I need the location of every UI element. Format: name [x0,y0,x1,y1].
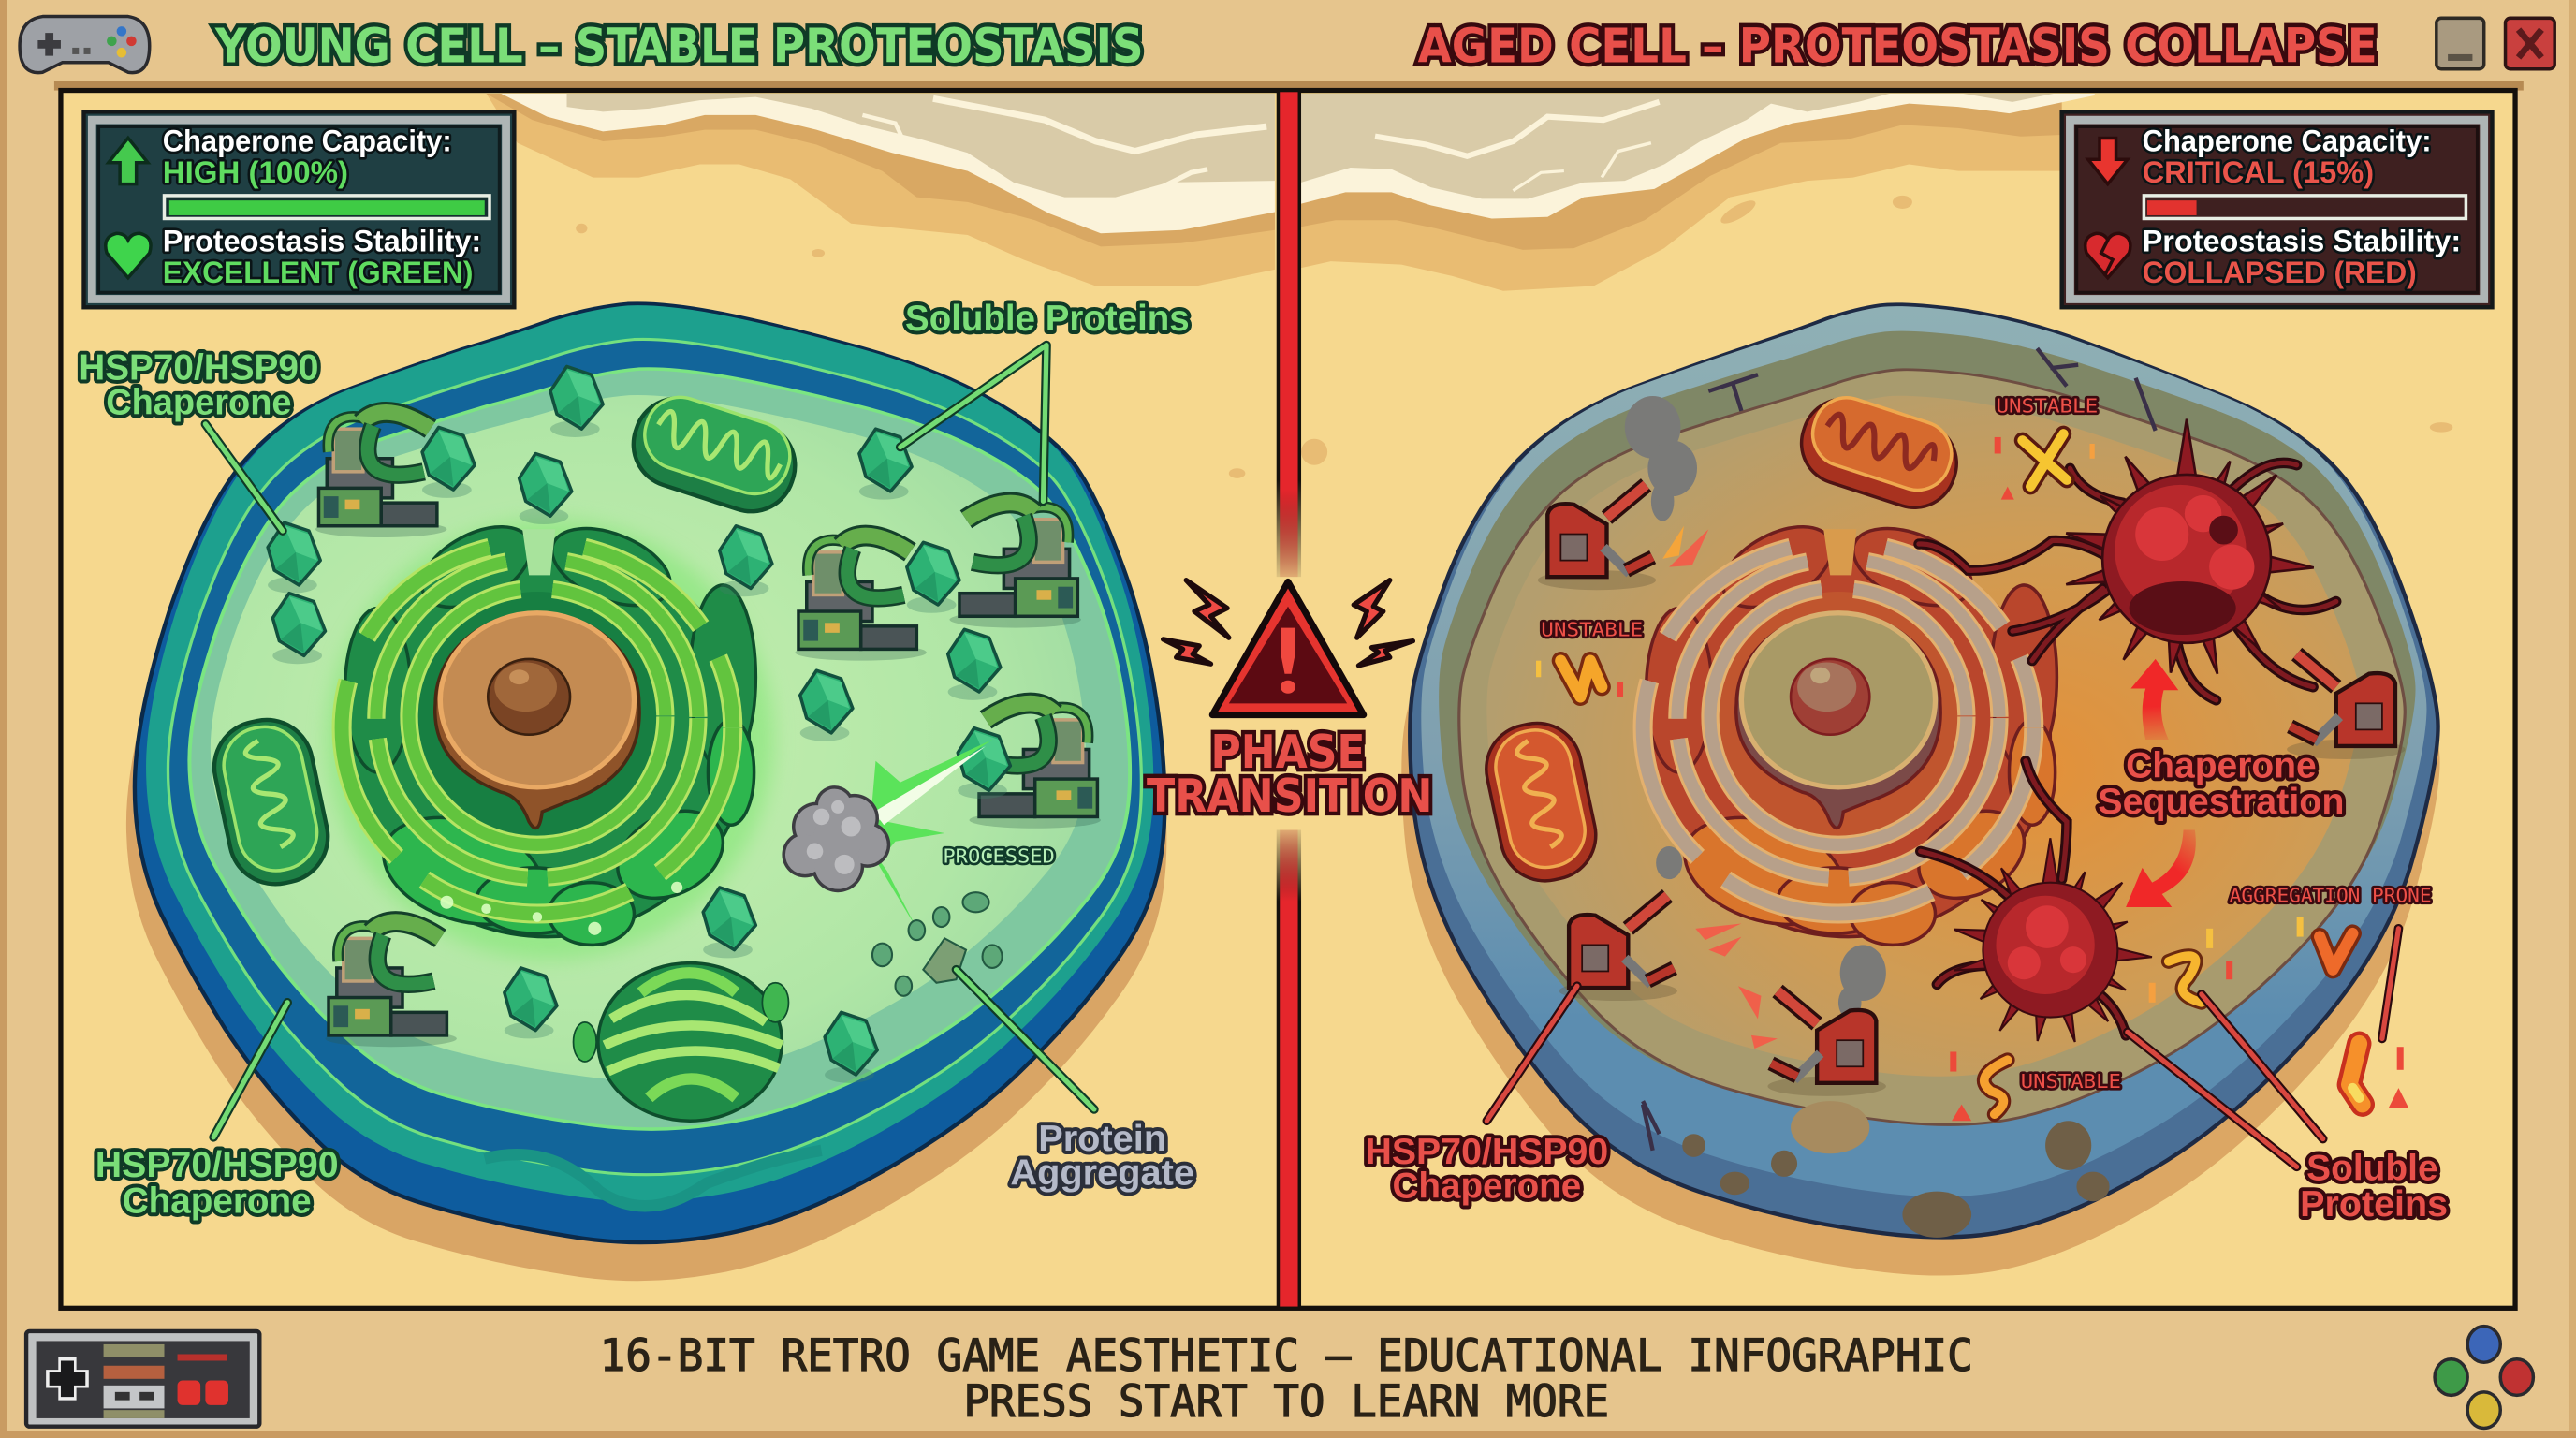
label: young chaperone top: HSP70/HSP90 [79,348,318,389]
panel: aged status [2062,111,2492,307]
mitochondrion left [1478,715,1604,889]
membrane grey rim [1421,306,2426,1196]
footer text [600,1330,1973,1428]
title: young cell: YOUNG CELL – STABLE PROTEOSTASIS [214,20,1144,75]
energy beam [857,740,992,929]
footer text: 16-BIT RETRO GAME AESTHETIC – EDUCATIONAL INFOGRAPHIC [600,1330,1973,1382]
label: aged chaperone: HSP70/HSP90 [1365,1132,1608,1172]
cytoplasm edge [1459,370,2405,1124]
aged leader lines [1486,929,2398,1167]
label: aged soluble proteins: Proteins [2300,1184,2448,1225]
label: young chaperone bottom: Chaperone [123,1181,312,1222]
cytoplasm [1486,396,2361,1077]
label: young chaperone top [79,348,318,422]
protein aggregate [782,785,890,892]
arrow: sequestration up [2130,659,2178,740]
icon: broken heart [2086,233,2130,278]
membrane teal rim [146,305,1153,1202]
capacity value: CRITICAL (15%) [2143,155,2374,189]
label: aged chaperone: Chaperone [1392,1167,1581,1207]
label: protein aggregate [1010,1119,1194,1194]
membrane damage [1682,1101,2110,1238]
phase text: PHASE [1211,725,1365,779]
unstable proteins [1560,433,2363,1114]
young cell [126,304,1166,1281]
beach shoreline right [1301,94,2095,291]
membrane cracks [1643,348,2156,1151]
aged cell [1401,305,2440,1276]
unstable tag bottom: UNSTABLE [2021,1070,2121,1093]
exclamation mark [1281,628,1295,694]
broken chaperones [1538,485,2405,1096]
label: aged soluble proteins: Soluble [2306,1148,2438,1188]
cell membrane outer [135,304,1164,1242]
status bevel [92,120,506,299]
large protein aggregate [2061,419,2315,679]
capacity text: Chaperone Capacity: [2143,124,2432,158]
endoplasmic reticulum [1643,510,2056,945]
cell membrane outer [1410,305,2438,1237]
cytoplasm edge [189,369,1130,1129]
transition text: TRANSITION [1147,769,1432,823]
chaperone machines [315,412,1101,1047]
beach shoreline left [487,94,1275,286]
sand specks [576,196,2452,478]
young leader lines [205,345,1094,1137]
membrane blue band [168,339,1141,1175]
label: aged chaperone [1365,1132,1608,1207]
icon: close button [2506,18,2554,69]
sparks [1662,526,1778,1049]
footer text: PRESS START TO LEARN MORE [963,1376,1609,1428]
warning triangle [1212,581,1364,715]
label: young chaperone bottom [95,1145,339,1222]
aggregate tendrils [1919,462,2336,1035]
phase transition marker [1147,580,1432,823]
golgi apparatus [574,963,788,1121]
icon: game controller [20,17,150,73]
nucleus [435,613,639,828]
status frame [2062,111,2492,307]
lightning bolts [1164,580,1412,666]
capacity text: Chaperone Capacity: [163,124,452,158]
label: protein aggregate: Aggregate [1010,1153,1194,1194]
fragments [872,892,1003,996]
icon: down arrow [2088,138,2128,184]
cytoplasm [211,395,1086,1080]
membrane olive band [1439,331,2416,1123]
icon: minimize button [2437,18,2484,69]
nucleus [1736,613,1940,828]
stability text: Proteostasis Stability: [163,225,481,258]
status frame [84,111,514,307]
processed tag: PROCESSED [943,845,1055,868]
icon: colored buttons [2435,1327,2533,1428]
stability value: EXCELLENT (GREEN) [163,256,473,289]
icon: up arrow [109,138,148,184]
ER highlights [440,882,682,935]
icon: heart [106,233,151,278]
label: aged soluble proteins [2300,1148,2448,1225]
mitochondrion left [206,712,336,892]
panel: young status [84,111,514,307]
mitochondrion top [622,386,807,522]
cell shadow [126,338,1166,1281]
capacity bar [2144,196,2466,218]
label: young chaperone top: Chaperone [106,382,292,422]
endoplasmic reticulum glow [327,520,774,960]
capacity bar [165,196,490,218]
smoke clouds [1625,396,1886,1019]
mitochondrion top [1791,387,1968,519]
label: young soluble proteins: Soluble Proteins [905,299,1190,339]
label: chaperone sequestration [2098,745,2345,822]
arrow: sequestration down [2126,829,2196,907]
label: chaperone sequestration: Sequestration [2098,782,2345,822]
stability value: COLLAPSED (RED) [2143,256,2417,289]
status bevel [2070,120,2484,299]
cell shadow [1401,339,2440,1276]
label: protein aggregate: Protein [1038,1119,1166,1159]
membrane bottom swirl [485,1151,822,1206]
soluble proteins [268,366,1010,1083]
capacity value: HIGH (100%) [163,155,348,189]
title: aged cell: AGED CELL – PROTEOSTASIS COLLAPSE [1418,20,2378,75]
stability text: Proteostasis Stability: [2143,225,2461,258]
unstable tag top: UNSTABLE [1996,395,2098,418]
endoplasmic reticulum [342,510,755,945]
icon: NES gamepad [26,1331,259,1427]
warning marks [1536,437,2408,1121]
label: young chaperone bottom: HSP70/HSP90 [95,1145,339,1185]
label: chaperone sequestration: Chaperone [2126,745,2317,785]
aggregation prone tag: AGGREGATION PRONE [2230,885,2432,907]
divider [1277,92,1301,1307]
unstable tag left: UNSTABLE [1541,618,1643,640]
small protein aggregate [1950,838,2153,1046]
